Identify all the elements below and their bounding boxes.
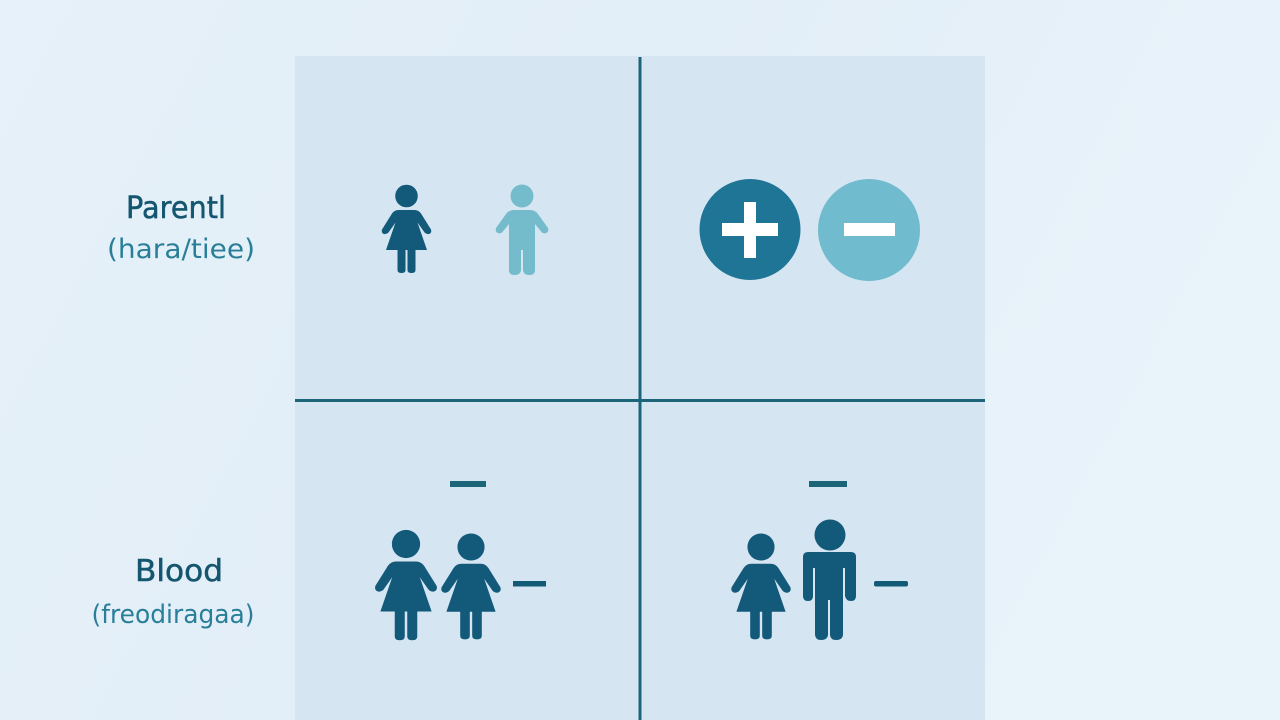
row label: parent <box>107 191 255 265</box>
label subtext: (hara/tiee): (hara/tiee) <box>107 234 255 265</box>
icon: minus circle <box>818 179 920 281</box>
icon: female figure, top left cell <box>382 185 431 273</box>
panel: grid background <box>295 56 985 720</box>
icon: female figure, bottom right <box>731 533 791 639</box>
minus mark: bottom left side <box>513 581 546 586</box>
horizontal grid axis <box>295 399 985 402</box>
minus mark: bottom right top <box>809 481 847 487</box>
icon: male figure, bottom right <box>803 520 856 640</box>
row label: blood <box>92 554 254 630</box>
icon: plus circle <box>700 179 800 280</box>
minus mark: bottom left top <box>450 481 486 487</box>
icon: female figure, bottom left second <box>441 533 501 639</box>
label subtext: (freodiragaa): (freodiragaa) <box>92 600 254 630</box>
minus mark: bottom right side <box>874 581 908 586</box>
vertical grid axis <box>638 57 642 720</box>
label heading: Blood: Blood <box>135 554 223 589</box>
icon: child figure, top left cell <box>496 184 548 275</box>
label heading: Parentl: Parentl <box>126 191 226 226</box>
icon: female figure, bottom left first <box>375 530 437 640</box>
